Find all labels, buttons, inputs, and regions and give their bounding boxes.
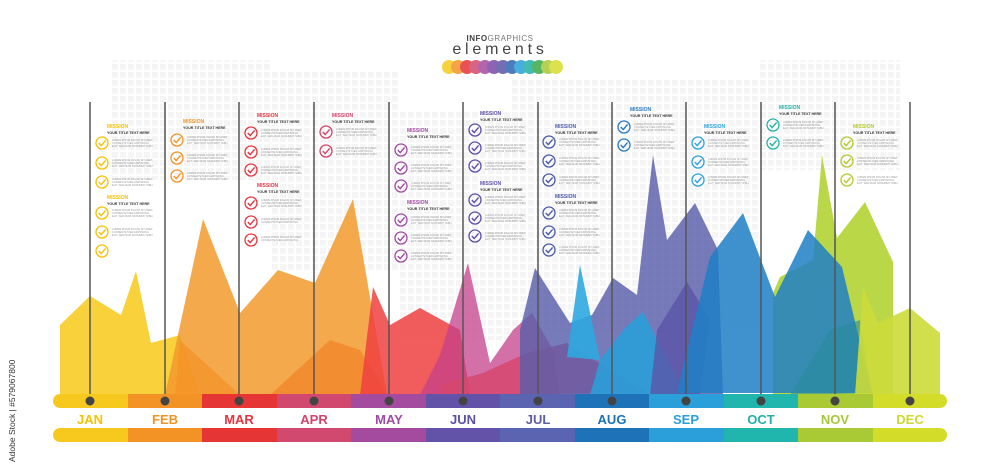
panel: SEP mission: LOREM IPSUM DOLOR SIT AMET,: [708, 157, 749, 161]
panel: AUG mission: LOREM IPSUM DOLOR SIT AMET,: [634, 140, 675, 144]
panel: APR mission: CONSECTETUER ADIPISCING: [336, 130, 373, 134]
vertical month lines: [90, 102, 910, 401]
month labels: JAN: [77, 412, 103, 427]
panel: AUG mission: CONSECTETUER ADIPISCING: [634, 143, 671, 147]
panel: JUN missions: LOREM IPSUM DOLOR SIT AMET,: [485, 213, 526, 217]
panel: MAR missions: ELIT, SED DIAM NONUMMY NIBH: [261, 134, 302, 138]
panel: FEB mission: CONSECTETUER ADIPISCING: [187, 156, 224, 160]
panel: MAY missions: [395, 128, 452, 262]
panel: SEP mission: ELIT, SED DIAM NONUMMY NIBH: [708, 163, 749, 167]
month labels: AUG: [598, 412, 626, 427]
panel: FEB mission: LOREM IPSUM DOLOR SIT AMET,: [187, 171, 228, 175]
panel: JUL missions: LOREM IPSUM DOLOR SIT AMET,: [559, 137, 600, 141]
panel: JUN missions: ELIT, SED DIAM NONUMMY NIBH: [485, 201, 526, 205]
panel: MAY missions: ELIT, SED DIAM NONUMMY NIBH: [411, 151, 452, 155]
panel: SEP mission: CONSECTETUER ADIPISCING: [708, 178, 745, 182]
panel: MAY missions: ELIT, SED DIAM NONUMMY NIBH: [411, 187, 452, 191]
panel: JUN missions: CONSECTETUER ADIPISCING: [485, 164, 522, 168]
panel: JUL missions: LOREM IPSUM DOLOR SIT AMET,: [559, 156, 600, 160]
panel: MAY missions: CONSECTETUER ADIPISCING: [411, 236, 448, 240]
panel: JUL missions: ELIT, SED DIAM NONUMMY NIBH: [559, 214, 600, 218]
panel: MAY missions: LOREM IPSUM DOLOR SIT AMET,: [411, 215, 452, 219]
panel: MAR missions: LOREM IPSUM DOLOR SIT AMET,: [261, 198, 302, 202]
panel: JUN missions: LOREM IPSUM DOLOR SIT AMET,: [485, 195, 526, 199]
panel: NOV mission: YOUR TITLE TEXT HERE: [853, 131, 896, 135]
panel: JUL missions: YOUR TITLE TEXT HERE: [555, 201, 598, 205]
panel: MAY missions: ELIT, SED DIAM NONUMMY NIBH: [411, 221, 452, 225]
panel: APR mission: MISSION: [332, 113, 354, 119]
panel: NOV mission: ELIT, SED DIAM NONUMMY NIBH: [857, 144, 898, 148]
panel: MAR missions: CONSECTETUER ADIPISCING: [261, 150, 298, 154]
panel: FEB mission: CONSECTETUER ADIPISCING: [187, 138, 224, 142]
panel: JAN missions: MISSION: [107, 124, 129, 130]
panel: MAY missions: MISSION: [407, 200, 429, 206]
panel: JAN missions: YOUR TITLE TEXT HERE: [107, 131, 150, 135]
month labels: [77, 412, 924, 427]
panel: JAN missions: [96, 124, 153, 257]
title: [442, 34, 563, 74]
panel: MAR missions: MISSION: [257, 183, 279, 189]
panel: AUG mission: MISSION: [630, 107, 652, 113]
panel: NOV mission: LOREM IPSUM DOLOR SIT AMET,: [857, 138, 898, 142]
panel: MAR missions: CONSECTETUER ADIPISCING: [261, 131, 298, 135]
panel: JAN missions: ELIT, SED DIAM NONUMMY NIBH: [112, 214, 153, 218]
panel: APR mission: [320, 113, 377, 157]
panel: JUN missions: ELIT, SED DIAM NONUMMY NIBH: [485, 167, 526, 171]
panel: FEB mission: ELIT, SED DIAM NONUMMY NIBH: [187, 177, 228, 181]
panel: OCT mission: CONSECTETUER ADIPISCING: [783, 123, 820, 127]
panel: NOV mission: ELIT, SED DIAM NONUMMY NIBH: [857, 162, 898, 166]
month labels: OCT: [747, 412, 775, 427]
panel: MAR missions: ELIT, SED DIAM NONUMMY NIBH: [261, 204, 302, 208]
panel: OCT mission: LOREM IPSUM DOLOR SIT AMET,: [783, 120, 824, 124]
panel: SEP mission: CONSECTETUER ADIPISCING: [708, 160, 745, 164]
month labels: JUL: [526, 412, 550, 427]
panel: SEP mission: CONSECTETUER ADIPISCING: [708, 141, 745, 145]
panel: OCT mission: CONSECTETUER ADIPISCING: [783, 141, 820, 145]
panel: JUN missions: MISSION: [480, 111, 502, 117]
panel: JUL missions: LOREM IPSUM DOLOR SIT AMET,: [559, 227, 600, 231]
panel: MAR missions: LOREM IPSUM DOLOR SIT AMET,: [261, 128, 302, 132]
panel: OCT mission: LOREM IPSUM DOLOR SIT AMET,: [783, 138, 824, 142]
panel: JAN missions: CONSECTETUER ADIPISCING: [112, 180, 149, 184]
panel: FEB mission: ELIT, SED DIAM NONUMMY NIBH: [187, 141, 228, 145]
panel: JUN missions: ELIT, SED DIAM NONUMMY NIBH: [485, 219, 526, 223]
panel: FEB mission: LOREM IPSUM DOLOR SIT AMET,: [187, 153, 228, 157]
panel: SEP mission: YOUR TITLE TEXT HERE: [704, 131, 747, 135]
panel: MAY missions: ELIT, SED DIAM NONUMMY NIBH: [411, 169, 452, 173]
panel: JUL missions: CONSECTETUER ADIPISCING: [559, 248, 596, 252]
panel: MAY missions: MISSION: [407, 128, 429, 134]
panel: SEP mission: MISSION: [704, 124, 726, 130]
panel: MAR missions: LOREM IPSUM DOLOR SIT AMET,: [261, 165, 302, 169]
panel: JUN missions: YOUR TITLE TEXT HERE: [480, 118, 523, 122]
panel: JUN missions: CONSECTETUER ADIPISCING: [485, 216, 522, 220]
panel: JUN missions: LOREM IPSUM DOLOR SIT AMET,: [485, 161, 526, 165]
panel: OCT mission: MISSION: [779, 105, 801, 111]
panel: JUL missions: LOREM IPSUM DOLOR SIT AMET,: [559, 245, 600, 249]
panel: MAY missions: LOREM IPSUM DOLOR SIT AMET,: [411, 181, 452, 185]
timeline bar: bottom: [53, 428, 947, 442]
panel: NOV mission: CONSECTETUER ADIPISCING: [857, 178, 894, 182]
month labels: DEC: [896, 412, 924, 427]
panel: FEB mission: YOUR TITLE TEXT HERE: [183, 126, 226, 130]
panel: MAY missions: ELIT, SED DIAM NONUMMY NIBH: [411, 239, 452, 243]
panel: MAR missions: YOUR TITLE TEXT HERE: [257, 190, 300, 194]
panel: SEP mission: ELIT, SED DIAM NONUMMY NIBH: [708, 181, 749, 185]
title: elements: [452, 41, 548, 58]
panel: JUN missions: YOUR TITLE TEXT HERE: [480, 188, 523, 192]
panel: JAN missions: MISSION: [107, 195, 129, 201]
panel: JUN missions: ELIT, SED DIAM NONUMMY NIBH: [485, 237, 526, 241]
panel: JUL missions: ELIT, SED DIAM NONUMMY NIBH: [559, 233, 600, 237]
panel: FEB mission: LOREM IPSUM DOLOR SIT AMET,: [187, 135, 228, 139]
panel: SEP mission: LOREM IPSUM DOLOR SIT AMET,: [708, 138, 749, 142]
timeline bar: top: [53, 394, 947, 408]
month labels: MAY: [375, 412, 403, 427]
panel: NOV mission: CONSECTETUER ADIPISCING: [857, 159, 894, 163]
title: INFOGRAPHICS: [467, 34, 533, 43]
panel: JUL missions: LOREM IPSUM DOLOR SIT AMET,: [559, 208, 600, 212]
panel: NOV mission: [841, 124, 898, 186]
month labels: MAR: [224, 412, 254, 427]
panel: MAY missions: CONSECTETUER ADIPISCING: [411, 254, 448, 258]
panel: MAY missions: YOUR TITLE TEXT HERE: [407, 207, 450, 211]
panel: AUG mission: [618, 107, 675, 151]
panel: JAN missions: CONSECTETUER ADIPISCING: [112, 230, 149, 234]
panel: SEP mission: ELIT, SED DIAM NONUMMY NIBH: [708, 144, 749, 148]
panel: JAN missions: ELIT, SED DIAM NONUMMY NIBH: [112, 183, 153, 187]
panel: MAY missions: CONSECTETUER ADIPISCING: [411, 148, 448, 152]
background world map pattern: [110, 60, 900, 340]
stock id text: Adobe Stock | #579067800: [7, 359, 17, 462]
panel: MAY missions: LOREM IPSUM DOLOR SIT AMET,: [411, 145, 452, 149]
panel: JUL missions: CONSECTETUER ADIPISCING: [559, 159, 596, 163]
panel: JUL missions: ELIT, SED DIAM NONUMMY NIBH: [559, 251, 600, 255]
panel: MAR missions: LOREM IPSUM DOLOR SIT AMET,: [261, 147, 302, 151]
panel: AUG mission: ELIT, SED DIAM NONUMMY NIBH: [634, 146, 675, 150]
panel: JUN missions: CONSECTETUER ADIPISCING: [485, 128, 522, 132]
panel: FEB mission: CONSECTETUER ADIPISCING: [187, 174, 224, 178]
panel: JAN missions: ELIT, SED DIAM NONUMMY NIBH: [112, 144, 153, 148]
panel: JUL missions: CONSECTETUER ADIPISCING: [559, 230, 596, 234]
panel: JUN missions: LOREM IPSUM DOLOR SIT AMET,: [485, 143, 526, 147]
month labels: APR: [300, 412, 328, 427]
panel: JAN missions: LOREM IPSUM DOLOR SIT AMET,: [112, 177, 153, 181]
panel: SEP mission: [692, 124, 749, 186]
panel: JUN missions: CONSECTETUER ADIPISCING: [485, 198, 522, 202]
month labels: NOV: [821, 412, 849, 427]
panel: FEB mission: [171, 119, 228, 182]
panel: AUG mission: CONSECTETUER ADIPISCING: [634, 125, 671, 129]
panel: MAR missions: CONSECTETUER ADIPISCING: [261, 220, 298, 224]
panel: MAY missions: CONSECTETUER ADIPISCING: [411, 166, 448, 170]
panel: NOV mission: ELIT, SED DIAM NONUMMY NIBH: [857, 181, 898, 185]
panel: JAN missions: YOUR TITLE TEXT HERE: [107, 202, 150, 206]
panel: JUL missions: CONSECTETUER ADIPISCING: [559, 211, 596, 215]
panel: OCT mission: [767, 105, 824, 149]
panel: FEB mission: ELIT, SED DIAM NONUMMY NIBH: [187, 159, 228, 163]
panel: JUL missions: LOREM IPSUM DOLOR SIT AMET,: [559, 175, 600, 179]
panel: MAR missions: LOREM IPSUM DOLOR SIT AMET,: [261, 217, 302, 221]
panel: JUN missions: ELIT, SED DIAM NONUMMY NIBH: [485, 131, 526, 135]
panel: OCT mission: ELIT, SED DIAM NONUMMY NIBH: [783, 144, 824, 148]
panel: JUL missions: MISSION: [555, 194, 577, 200]
month labels: SEP: [673, 412, 699, 427]
panel: MAY missions: CONSECTETUER ADIPISCING: [411, 218, 448, 222]
panel: JAN missions: LOREM IPSUM DOLOR SIT AMET,: [112, 158, 153, 162]
panel: JAN missions: CONSECTETUER ADIPISCING: [112, 141, 149, 145]
panel: JAN missions: ELIT, SED DIAM NONUMMY NIBH: [112, 233, 153, 237]
panel: MAR missions: MISSION: [257, 113, 279, 119]
panel: MAR missions: CONSECTETUER ADIPISCING: [261, 168, 298, 172]
month labels: JUN: [450, 412, 476, 427]
panel: MAY missions: LOREM IPSUM DOLOR SIT AMET,: [411, 233, 452, 237]
panel: JUL missions: YOUR TITLE TEXT HERE: [555, 131, 598, 135]
panel: JAN missions: LOREM IPSUM DOLOR SIT AMET,: [112, 138, 153, 142]
panel: JUN missions: CONSECTETUER ADIPISCING: [485, 146, 522, 150]
panel: AUG mission: ELIT, SED DIAM NONUMMY NIBH: [634, 128, 675, 132]
panel: JUN missions: ELIT, SED DIAM NONUMMY NIBH: [485, 149, 526, 153]
panel: JUL missions: CONSECTETUER ADIPISCING: [559, 178, 596, 182]
panel: JUN missions: MISSION: [480, 181, 502, 187]
panel: NOV mission: MISSION: [853, 124, 875, 130]
panel: MAR missions: YOUR TITLE TEXT HERE: [257, 120, 300, 124]
panel: MAY missions: LOREM IPSUM DOLOR SIT AMET,: [411, 251, 452, 255]
panel: JUN missions: LOREM IPSUM DOLOR SIT AMET,: [485, 231, 526, 235]
panel: JAN missions: ELIT, SED DIAM NONUMMY NIBH: [112, 164, 153, 168]
panel: APR mission: LOREM IPSUM DOLOR SIT AMET,: [336, 127, 377, 131]
panel: JUL missions: ELIT, SED DIAM NONUMMY NIBH: [559, 143, 600, 147]
panel: JAN missions: LOREM IPSUM DOLOR SIT AMET,: [112, 208, 153, 212]
panel: SEP mission: LOREM IPSUM DOLOR SIT AMET,: [708, 175, 749, 179]
panel: JUL missions: CONSECTETUER ADIPISCING: [559, 140, 596, 144]
panel: JAN missions: CONSECTETUER ADIPISCING: [112, 161, 149, 165]
panel: MAR missions: CONSECTETUER ADIPISCING: [261, 201, 298, 205]
panel: MAR missions: ELIT, SED DIAM NONUMMY NIBH: [261, 171, 302, 175]
panel: OCT mission: YOUR TITLE TEXT HERE: [779, 112, 822, 116]
timeline dots: [86, 396, 914, 406]
panel: JUL missions: ELIT, SED DIAM NONUMMY NIBH: [559, 162, 600, 166]
panel: JUN missions: CONSECTETUER ADIPISCING: [485, 234, 522, 238]
panel: FEB mission: MISSION: [183, 119, 205, 125]
area chart mountains: [60, 155, 940, 395]
panel: APR mission: ELIT, SED DIAM NONUMMY NIBH: [336, 133, 377, 137]
panel: APR mission: YOUR TITLE TEXT HERE: [332, 120, 375, 124]
panel: JUL missions: ELIT, SED DIAM NONUMMY NIBH: [559, 181, 600, 185]
panel: JAN missions: CONSECTETUER ADIPISCING: [112, 211, 149, 215]
panel: MAR missions: LOREM IPSUM DOLOR SIT AMET,: [261, 235, 302, 239]
panel: JUL missions: [543, 124, 600, 256]
panel: MAR missions: [245, 113, 302, 246]
panel: MAR missions: ELIT, SED DIAM NONUMMY NIBH: [261, 153, 302, 157]
panel: MAY missions: ELIT, SED DIAM NONUMMY NIBH: [411, 257, 452, 261]
panel: AUG mission: YOUR TITLE TEXT HERE: [630, 114, 673, 118]
panel: NOV mission: CONSECTETUER ADIPISCING: [857, 141, 894, 145]
month labels: FEB: [152, 412, 178, 427]
panel: OCT mission: ELIT, SED DIAM NONUMMY NIBH: [783, 126, 824, 130]
panel: AUG mission: LOREM IPSUM DOLOR SIT AMET,: [634, 122, 675, 126]
panel: JUN missions: LOREM IPSUM DOLOR SIT AMET,: [485, 125, 526, 129]
panel: MAY missions: YOUR TITLE TEXT HERE: [407, 135, 450, 139]
panel: MAY missions: LOREM IPSUM DOLOR SIT AMET,: [411, 163, 452, 167]
panel: MAY missions: CONSECTETUER ADIPISCING: [411, 184, 448, 188]
panel: JUL missions: MISSION: [555, 124, 577, 130]
panel: MAR missions: CONSECTETUER ADIPISCING: [261, 238, 298, 242]
panel: JUN missions: [469, 111, 526, 242]
panel: NOV mission: LOREM IPSUM DOLOR SIT AMET,: [857, 156, 898, 160]
panel: APR mission: CONSECTETUER ADIPISCING: [336, 149, 373, 153]
panel: NOV mission: LOREM IPSUM DOLOR SIT AMET,: [857, 175, 898, 179]
panel: APR mission: ELIT, SED DIAM NONUMMY NIBH: [336, 152, 377, 156]
panel: APR mission: LOREM IPSUM DOLOR SIT AMET,: [336, 146, 377, 150]
panel: JAN missions: LOREM IPSUM DOLOR SIT AMET,: [112, 227, 153, 231]
